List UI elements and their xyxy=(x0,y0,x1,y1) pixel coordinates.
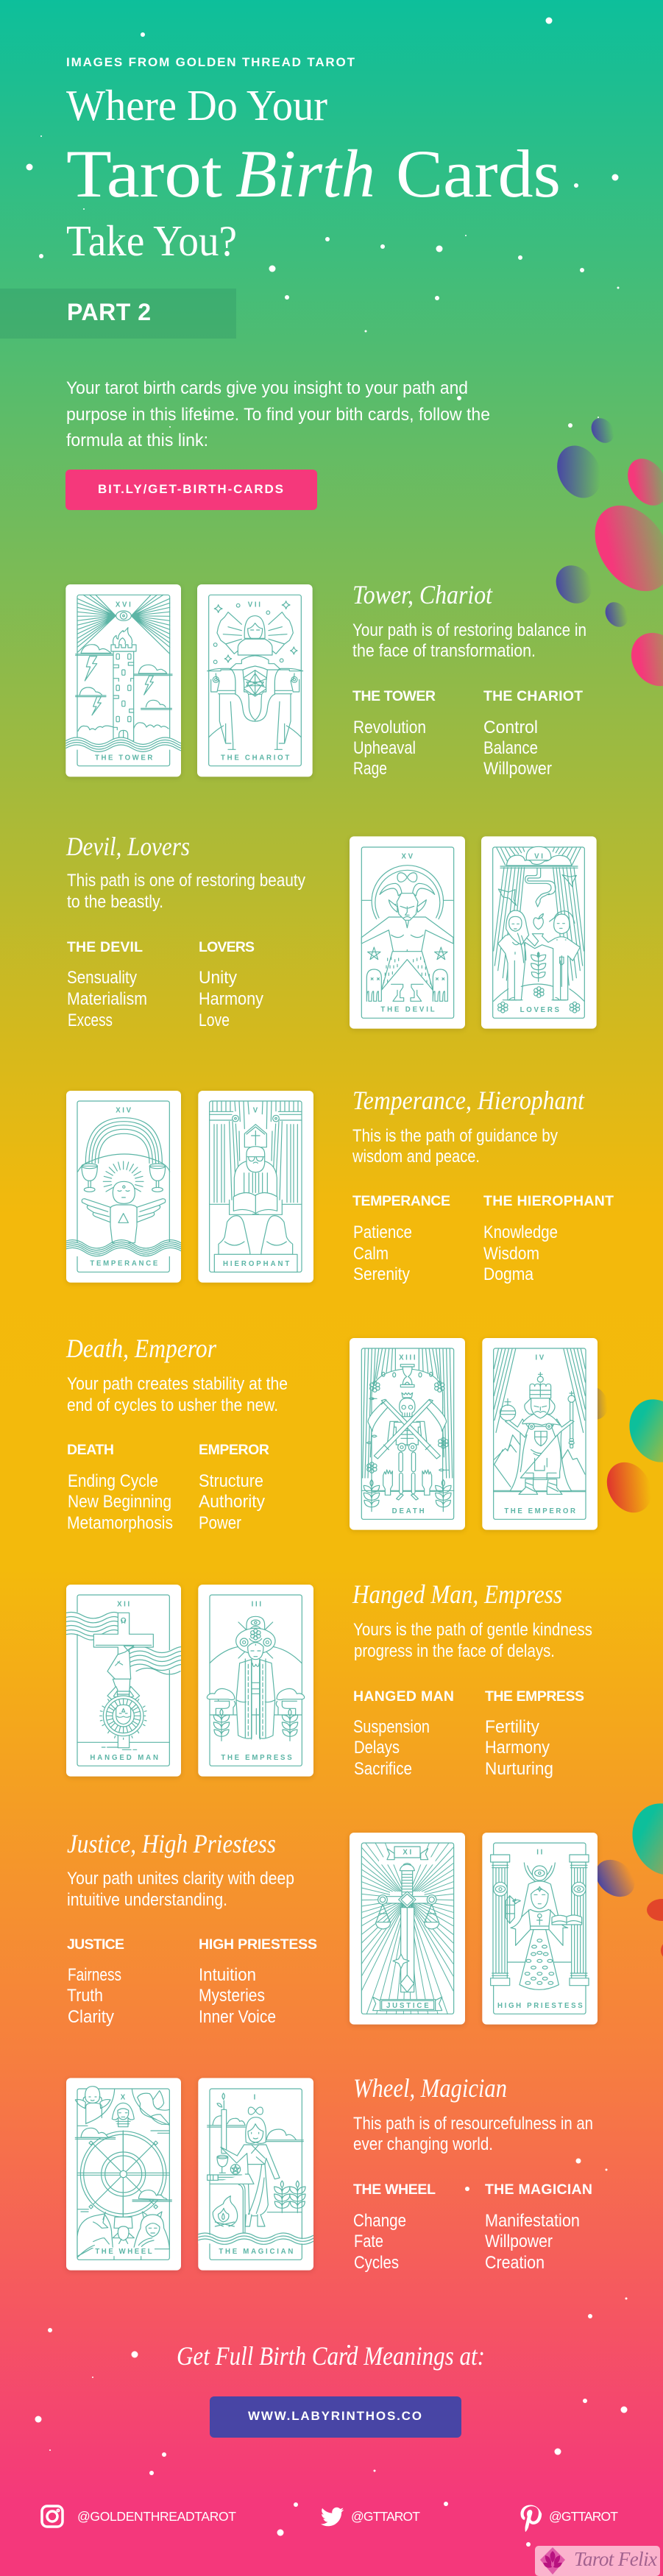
column: emperor: Power xyxy=(199,1513,241,1533)
card: justice xyxy=(350,1833,465,2025)
heading: Justice, High Priestess xyxy=(67,1829,276,1858)
card: lovers xyxy=(481,836,597,1029)
path description xyxy=(67,1869,294,1910)
column: lovers: Harmony xyxy=(199,989,263,1009)
pink link button: BIT.LY/GET-BIRTH-CARDS xyxy=(98,482,283,496)
heading: Wheel, Magician xyxy=(353,2073,507,2103)
card: the devil xyxy=(350,836,465,1029)
heading: Tower, Chariot xyxy=(352,580,493,609)
column: the empress xyxy=(485,1688,584,1779)
call to action heading: Get Full Birth Card Meanings at: xyxy=(177,2341,485,2371)
path description xyxy=(352,1126,558,1167)
card pair: hanged man and empress xyxy=(60,1585,313,1777)
card: high priestess xyxy=(482,1833,598,2025)
watermark: tarot felix: Tarot Felix xyxy=(574,2548,657,2570)
icon: lotus xyxy=(540,2547,565,2575)
column: hanged man: Sacrifice xyxy=(354,1759,412,1779)
intro paragraph: Your tarot birth cards give you insight to your path and xyxy=(66,378,468,398)
column: the wheel: Change xyxy=(353,2211,406,2231)
column: temperance: Serenity xyxy=(353,1264,410,1284)
column: the magician: Creation xyxy=(485,2253,545,2273)
path description: Your path creates stability at the xyxy=(67,1374,288,1394)
column: high priestess xyxy=(199,1936,317,2027)
card: the devil: XV xyxy=(402,852,415,860)
column: hanged man: HANGED MAN xyxy=(353,1688,454,1705)
card: lovers: VI xyxy=(534,852,545,860)
column: justice xyxy=(67,1936,124,2027)
card: emperor: THE EMPEROR xyxy=(504,1507,575,1515)
column: the hierophant: Wisdom xyxy=(483,1244,539,1264)
panel: hanged man, empress xyxy=(60,1579,592,1779)
blue website button xyxy=(210,2396,461,2438)
card: justice: XI xyxy=(403,1849,414,1857)
card pair: justice and high priestess xyxy=(350,1833,598,2025)
card: the tower xyxy=(65,584,182,779)
column: the devil: THE DEVIL xyxy=(67,939,143,955)
intro paragraph: formula at this link: xyxy=(66,431,208,450)
blue website button: WWW.LABYRINTHOS.CO xyxy=(248,2409,422,2423)
card: the devil: THE DEVIL xyxy=(380,1005,435,1013)
decorative stars bottom xyxy=(35,2158,627,2547)
card: the magician: THE MAGICIAN xyxy=(219,2248,293,2256)
column: lovers: Unity xyxy=(199,968,237,988)
column: high priestess: HIGH PRIESTESS xyxy=(199,1936,317,1953)
card: high priestess: HIGH PRIESTESS xyxy=(497,2002,583,2010)
card: temperance: XIV xyxy=(116,1106,133,1114)
decorative stars top xyxy=(26,18,620,428)
title: Tarot xyxy=(66,136,222,211)
path description: This path is one of restoring beauty xyxy=(67,871,305,891)
column: lovers: Love xyxy=(199,1011,230,1030)
path description: Your path is of restoring balance in xyxy=(352,620,586,640)
column: the empress: Fertility xyxy=(485,1717,539,1737)
card: the magician xyxy=(197,2078,315,2273)
card: hanged man: XII xyxy=(117,1601,132,1609)
column: the empress: THE EMPRESS xyxy=(485,1688,584,1705)
column: death: DEATH xyxy=(67,1442,114,1458)
column: the chariot: Willpower xyxy=(483,759,552,779)
card: the wheel xyxy=(66,2078,181,2271)
path description: Yours is the path of gentle kindness xyxy=(353,1620,592,1640)
heading: Devil, Lovers xyxy=(65,832,190,861)
path description: Your path unites clarity with deep xyxy=(67,1869,294,1889)
panel: justice, high priestess xyxy=(67,1829,598,2027)
column: temperance xyxy=(352,1193,450,1284)
column: the tower: Rage xyxy=(353,759,387,779)
panel: temperance, hierophant xyxy=(60,1086,614,1284)
card pair: devil and lovers xyxy=(350,836,597,1029)
column: the magician: THE MAGICIAN xyxy=(485,2182,592,2198)
title: Cards xyxy=(396,136,561,211)
column: the tower: THE TOWER xyxy=(352,688,436,704)
card pair: temperance and hierophant xyxy=(60,1091,313,1283)
card: temperance xyxy=(65,1091,182,1285)
card: emperor xyxy=(482,1338,598,1530)
path description: progress in the face of delays. xyxy=(354,1641,555,1661)
social: instagram: @GOLDENTHREADTAROT xyxy=(77,2509,236,2524)
column: death: New Beginning xyxy=(68,1492,171,1512)
column: death: Metamorphosis xyxy=(67,1513,173,1533)
card: hanged man xyxy=(65,1584,182,1780)
column: the hierophant xyxy=(483,1193,614,1284)
column: the wheel: Cycles xyxy=(354,2253,399,2273)
title: Where Do Your xyxy=(66,81,327,130)
title: Birth xyxy=(235,136,375,211)
column: temperance: Patience xyxy=(353,1222,412,1242)
path description: wisdom and peace. xyxy=(352,1147,480,1167)
path description: end of cycles to usher the new. xyxy=(67,1395,278,1415)
column: temperance: TEMPERANCE xyxy=(352,1193,450,1209)
card: hierophant: HIEROPHANT xyxy=(223,1260,289,1268)
path description: ever changing world. xyxy=(353,2134,493,2154)
card: justice: JUSTICE xyxy=(386,2002,429,2010)
social: pinterest: @GTTAROT xyxy=(549,2509,618,2524)
card pair: wheel and magician xyxy=(66,2078,333,2271)
column: the magician xyxy=(485,2182,592,2273)
column: the chariot: Balance xyxy=(483,738,538,758)
card: the wheel: X xyxy=(121,2093,127,2101)
column: the hierophant: Knowledge xyxy=(483,1222,558,1242)
card: hierophant: V xyxy=(253,1106,260,1114)
column: the empress: Harmony xyxy=(485,1738,550,1758)
column: justice: Truth xyxy=(67,1986,103,2006)
card: the chariot: THE CHARIOT xyxy=(221,754,289,762)
card: the magician: I xyxy=(254,2093,258,2101)
card: empress: III xyxy=(252,1601,263,1609)
column: high priestess: Mysteries xyxy=(199,1986,265,2006)
heading: Death, Emperor xyxy=(65,1334,217,1363)
card: hierophant xyxy=(198,1091,313,1283)
social: twitter: @GTTAROT xyxy=(351,2509,420,2524)
pink link button xyxy=(65,470,317,510)
icon: twitter xyxy=(321,2508,344,2526)
column: the chariot: Control xyxy=(483,718,538,737)
icon: pinterest xyxy=(521,2505,542,2532)
social: pinterest xyxy=(521,2505,618,2532)
card pair: death and emperor xyxy=(350,1338,598,1530)
column: the wheel: Fate xyxy=(354,2232,383,2251)
path description: the face of transformation. xyxy=(352,641,536,661)
column: justice: JUSTICE xyxy=(67,1936,124,1953)
column: the wheel: THE WHEEL xyxy=(353,2182,436,2198)
card: empress xyxy=(198,1585,313,1777)
panel: tower, chariot xyxy=(65,580,586,779)
path description: to the beastly. xyxy=(67,892,163,912)
intro paragraph: purpose in this lifetime. To find your bith cards, follow the xyxy=(66,405,490,425)
column: the tower: Revolution xyxy=(353,718,426,737)
path description xyxy=(353,1620,592,1661)
title: Take You? xyxy=(66,216,237,265)
card: death: DEATH xyxy=(392,1507,425,1515)
panel: devil, lovers xyxy=(65,832,597,1030)
column: the hierophant: Dogma xyxy=(483,1264,534,1284)
card: emperor: IV xyxy=(535,1354,546,1362)
icon: instagram xyxy=(42,2506,63,2527)
path description: This path is of resourcefulness in an xyxy=(353,2114,593,2134)
column: the chariot: THE CHARIOT xyxy=(483,688,583,704)
column: the magician: Manifestation xyxy=(485,2211,580,2231)
column: temperance: Calm xyxy=(353,1244,389,1264)
card: the chariot: VII xyxy=(248,601,263,609)
path description: intuitive understanding. xyxy=(67,1890,227,1910)
column: emperor: Structure xyxy=(199,1471,263,1491)
social: twitter xyxy=(321,2508,420,2526)
decorative blobs xyxy=(549,414,663,1961)
column: hanged man xyxy=(353,1688,454,1779)
title xyxy=(66,81,561,265)
path description xyxy=(353,2114,593,2154)
column: lovers: LOVERS xyxy=(199,939,255,955)
intro paragraph xyxy=(66,378,490,450)
panel: death, emperor xyxy=(65,1334,598,1533)
column: the devil: Excess xyxy=(68,1011,113,1030)
card: death: XIII xyxy=(399,1354,417,1362)
column: the devil: Sensuality xyxy=(67,968,137,988)
panel: wheel, magician xyxy=(66,2073,593,2273)
card: the tower: THE TOWER xyxy=(95,754,152,762)
card: high priestess: II xyxy=(536,1849,545,1857)
column: emperor: EMPEROR xyxy=(199,1442,269,1458)
part label band: PART 2 xyxy=(67,299,151,325)
path description: This is the path of guidance by xyxy=(352,1126,558,1146)
column: death: Ending Cycle xyxy=(68,1471,158,1491)
path description xyxy=(67,871,305,912)
card: the chariot xyxy=(197,584,313,776)
watermark: tarot felix xyxy=(535,2546,660,2576)
column: the devil: Materialism xyxy=(67,989,147,1009)
card: hanged man: HANGED MAN xyxy=(90,1754,158,1762)
card: lovers: LOVERS xyxy=(520,1006,560,1014)
heading: Hanged Man, Empress xyxy=(352,1579,562,1609)
column: lovers xyxy=(199,939,263,1030)
card: empress: THE EMPRESS xyxy=(221,1754,292,1762)
heading: Temperance, Hierophant xyxy=(352,1086,585,1115)
card: the wheel: THE WHEEL xyxy=(95,2248,152,2256)
column: the empress: Nurturing xyxy=(485,1759,553,1779)
card: death xyxy=(350,1338,465,1530)
path description xyxy=(67,1374,288,1415)
column: emperor xyxy=(199,1442,269,1533)
column: hanged man: Delays xyxy=(354,1738,400,1758)
card pair: tower and chariot xyxy=(65,584,313,776)
column: emperor: Authority xyxy=(199,1492,265,1512)
eyebrow: images credit: IMAGES FROM GOLDEN THREAD TAROT xyxy=(66,55,355,69)
column: justice: Clarity xyxy=(68,2007,114,2027)
column: justice: Fairness xyxy=(68,1965,121,1985)
social: instagram xyxy=(42,2506,236,2527)
column: the chariot xyxy=(483,688,583,779)
column: hanged man: Suspension xyxy=(353,1717,430,1737)
column: high priestess: Inner Voice xyxy=(199,2007,276,2027)
card: the tower: XVI xyxy=(116,601,132,609)
column: the tower xyxy=(352,688,436,779)
column: the hierophant: THE HIEROPHANT xyxy=(483,1193,614,1209)
column: the tower: Upheaval xyxy=(353,738,416,758)
column: high priestess: Intuition xyxy=(199,1965,256,1985)
column: the devil xyxy=(67,939,147,1030)
column: death xyxy=(67,1442,173,1533)
column: the wheel xyxy=(353,2182,436,2273)
card: temperance: TEMPERANCE xyxy=(90,1260,158,1268)
part label band xyxy=(0,289,236,339)
column: the magician: Willpower xyxy=(485,2232,553,2251)
path description xyxy=(352,620,586,661)
